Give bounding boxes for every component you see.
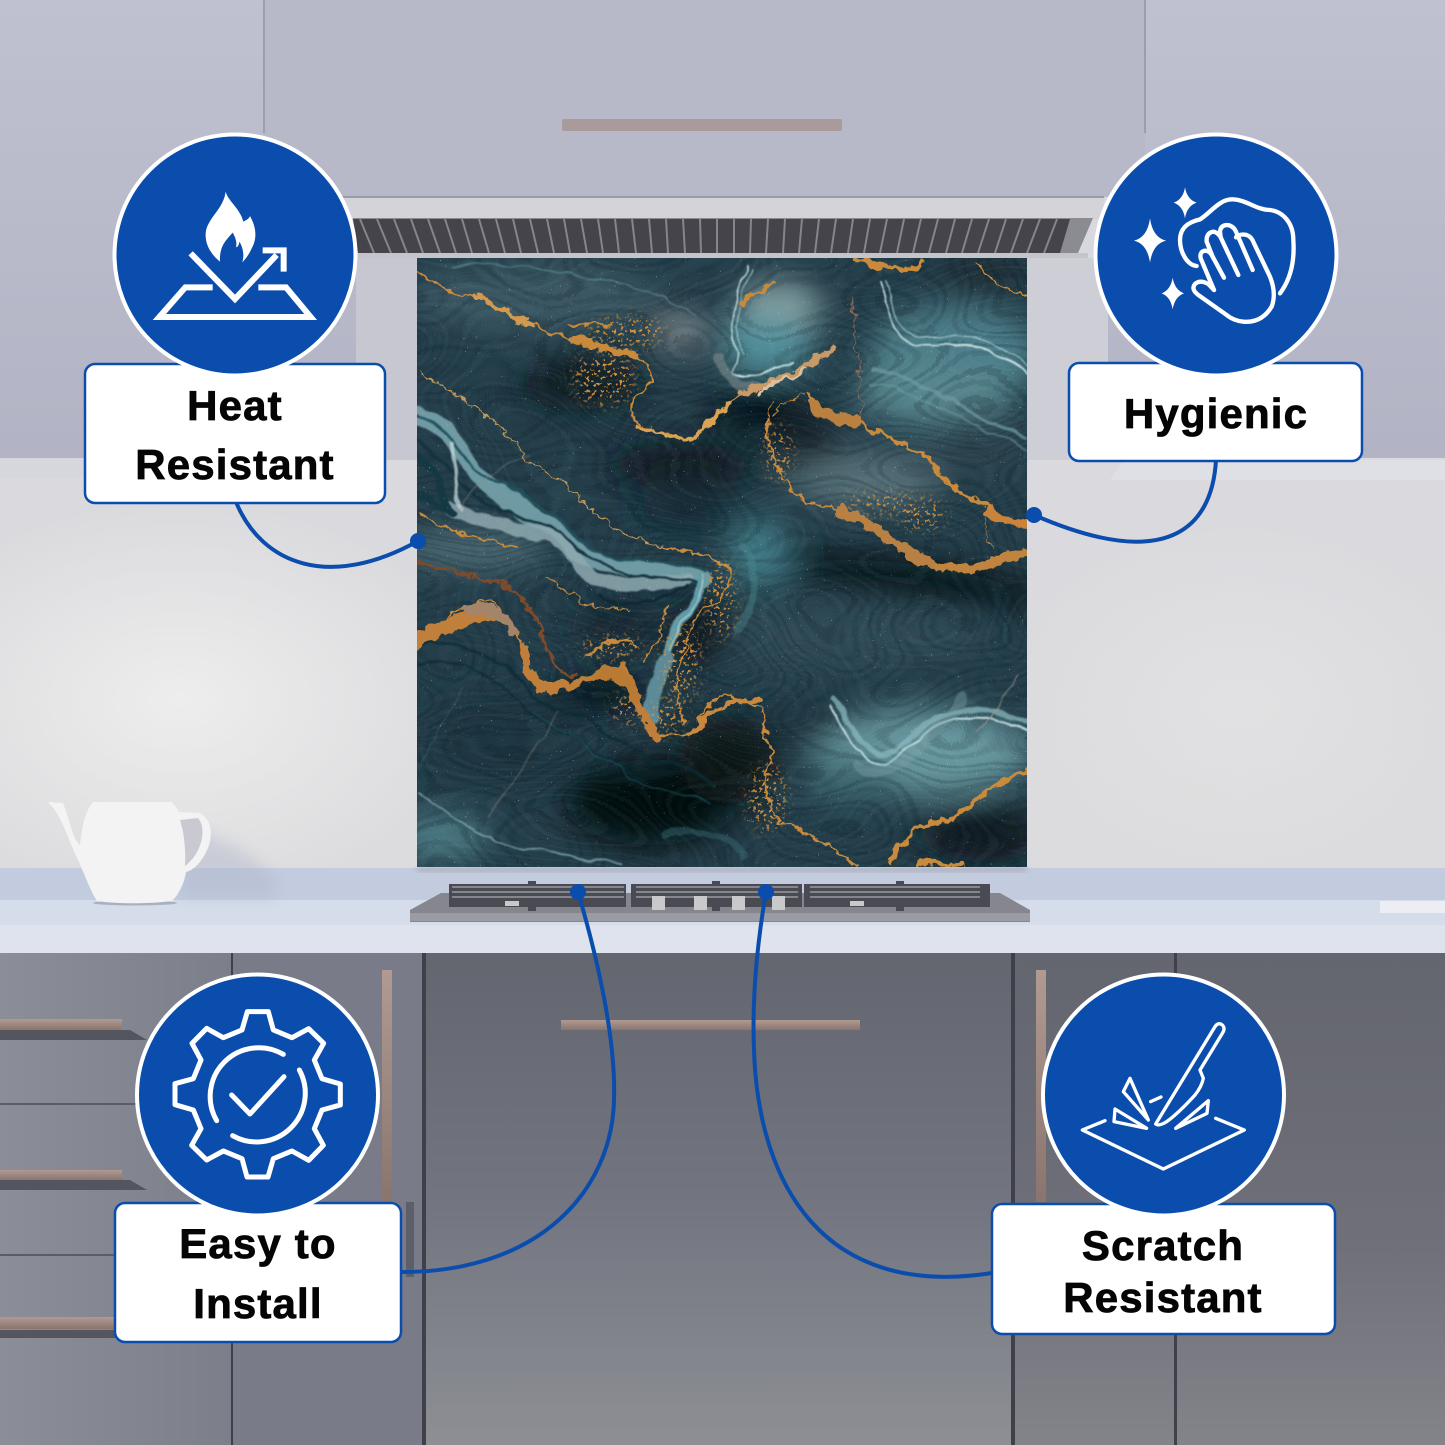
icon: gear with check mark <box>175 1012 340 1177</box>
label box <box>115 1203 401 1342</box>
badge <box>114 134 356 376</box>
icon: knife scratching a surface <box>1082 1024 1244 1169</box>
badge <box>137 974 378 1216</box>
range hood <box>340 196 1104 258</box>
upper cabinets <box>0 0 1445 480</box>
icon: hand wiping with cloth and sparkles <box>1134 187 1294 322</box>
connector: hygienic <box>1026 460 1216 542</box>
label box <box>85 364 385 503</box>
marble tonal clouds <box>394 258 1044 861</box>
callout: hygienic <box>1069 134 1362 461</box>
upper handle <box>562 119 842 131</box>
white speckle <box>417 258 1027 867</box>
countertop <box>0 867 1445 953</box>
gold speckle <box>562 306 956 843</box>
label text: Easy to <box>179 1220 337 1267</box>
cooktop <box>410 881 1030 922</box>
callout: easy to install: Install <box>193 1280 323 1327</box>
callout: scratch resistant: Resistant <box>1063 1274 1263 1321</box>
marble splashback panel <box>394 258 1044 867</box>
callout: scratch resistant <box>992 974 1335 1334</box>
teapot <box>48 802 275 906</box>
badge <box>1096 134 1336 376</box>
marble agate banding <box>417 258 1027 867</box>
label text: Scratch <box>1082 1222 1244 1269</box>
connector: easy to install <box>402 884 614 1272</box>
connector: heat resistant <box>236 502 426 567</box>
label box <box>992 1204 1335 1334</box>
label box <box>1069 363 1362 461</box>
icon: flame over surface with deflecting arrow <box>159 192 311 317</box>
marble teal bands <box>417 265 1027 865</box>
label text: Heat <box>187 382 283 429</box>
callout: easy to install <box>115 974 401 1342</box>
cabinet handles <box>0 970 1046 1329</box>
lower cabinets <box>0 953 1445 1445</box>
badge <box>1043 974 1284 1216</box>
wall <box>0 258 1445 873</box>
callout: heat resistant <box>85 134 385 503</box>
callout: heat resistant: Resistant <box>135 441 335 488</box>
connector: scratch resistant <box>754 884 992 1277</box>
label text: Hygienic <box>1124 390 1308 437</box>
gold veins <box>417 260 1027 865</box>
